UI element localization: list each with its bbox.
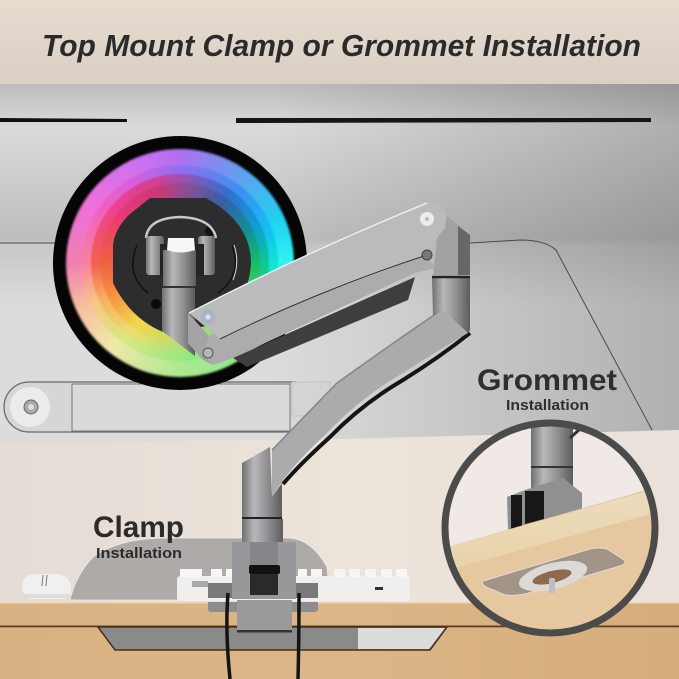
monitor back	[0, 84, 679, 443]
VESA plate	[113, 198, 251, 332]
cables	[227, 593, 299, 679]
label: Clamp	[93, 511, 184, 562]
desk clamp	[208, 542, 318, 632]
monitor port bar	[4, 382, 330, 432]
label: Grommet: Installation	[506, 398, 589, 414]
grommet arm post	[507, 426, 582, 530]
mouse	[22, 574, 71, 599]
grommet inset circle	[440, 420, 660, 650]
desk and slot	[0, 602, 679, 679]
title: Top Mount Clamp or Grommet Installation	[42, 28, 641, 63]
lower arm	[242, 310, 470, 543]
grommet tabletop	[450, 490, 652, 630]
keyboard	[177, 569, 410, 601]
grommet plate	[482, 548, 625, 597]
label: Clamp: Clamp	[93, 511, 184, 544]
label: Clamp: Installation	[96, 545, 182, 562]
tilt bracket	[146, 217, 216, 356]
elbow joint	[432, 216, 470, 333]
label: Grommet	[477, 364, 617, 414]
RGB light ring	[53, 136, 307, 390]
label: Grommet: Grommet	[477, 364, 617, 397]
headrest fabric	[70, 538, 330, 600]
upper arm	[188, 202, 447, 367]
